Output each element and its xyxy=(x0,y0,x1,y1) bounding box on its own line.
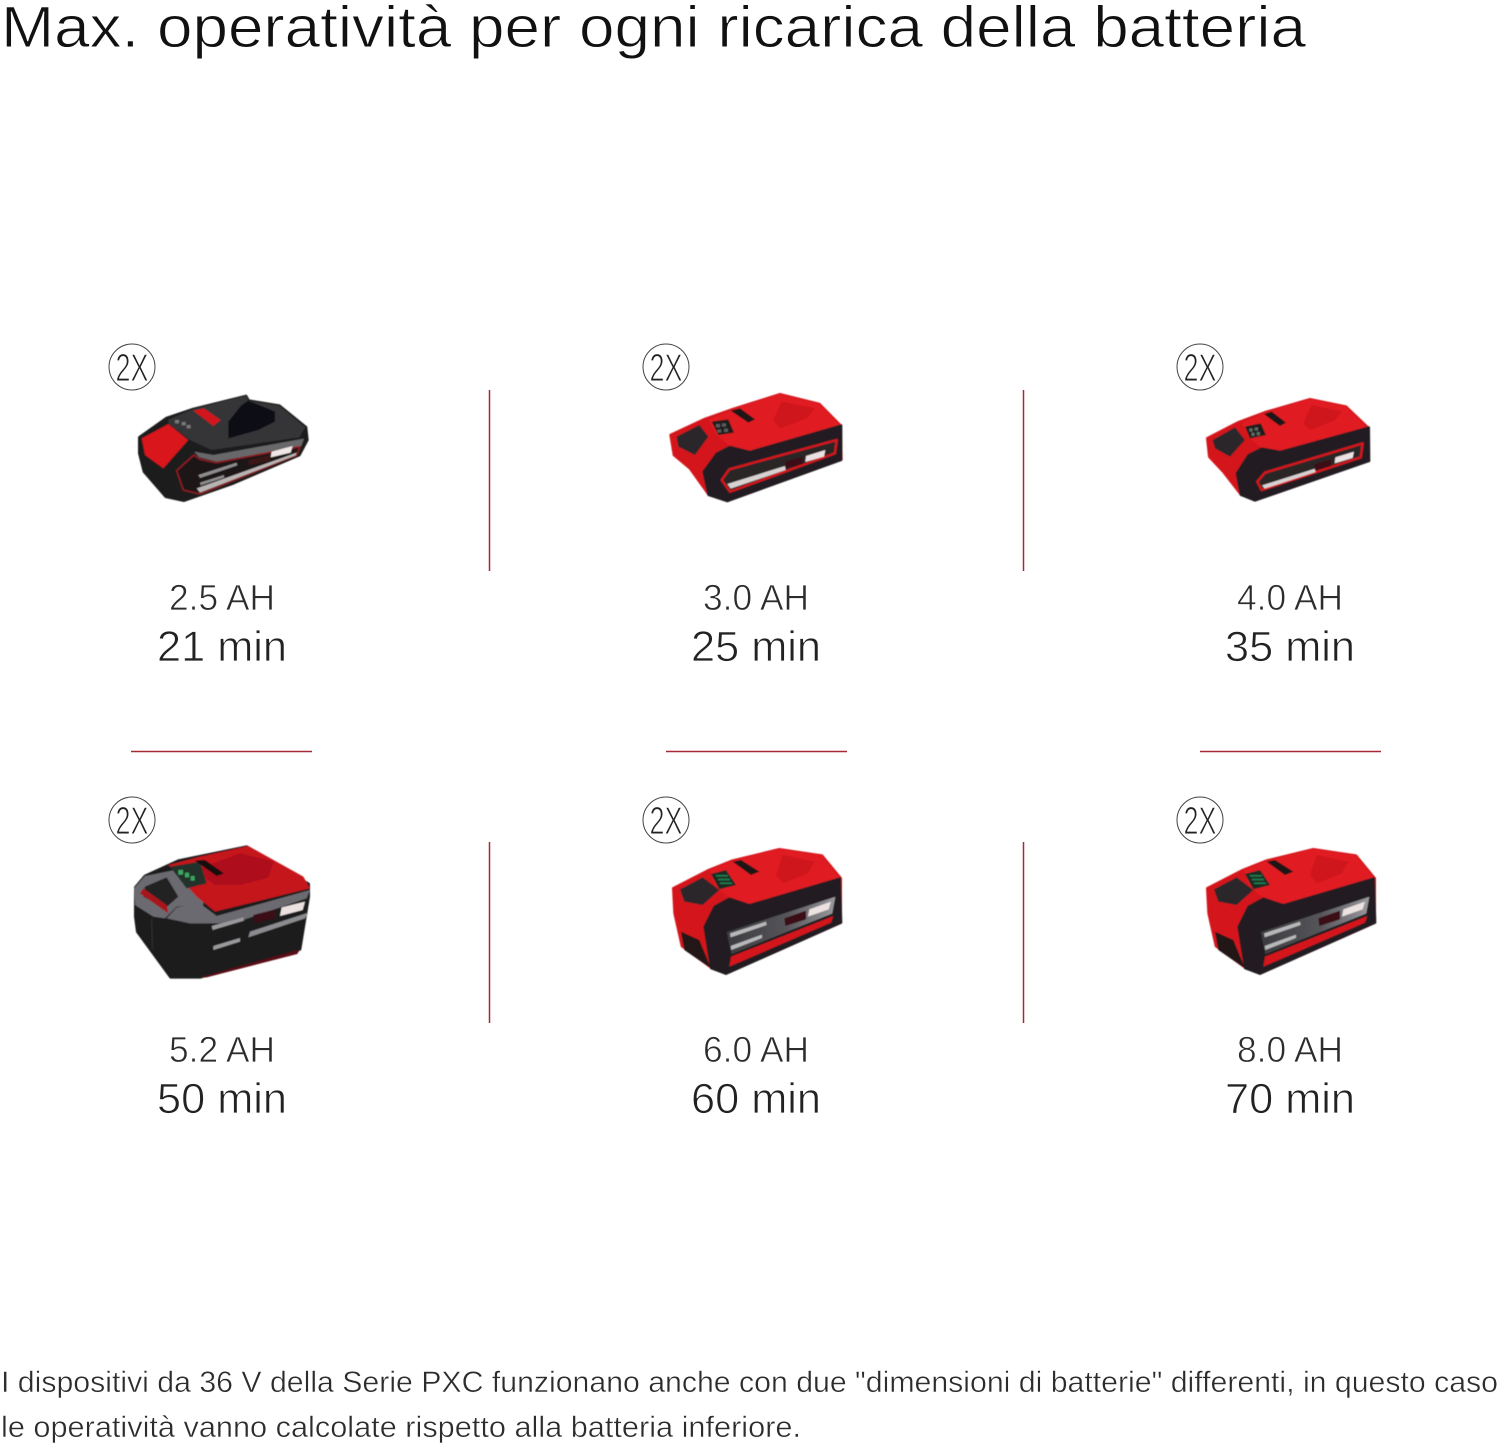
runtime: 50 min xyxy=(157,1075,287,1123)
panel: 2.5 AH battery xyxy=(109,344,307,671)
capacity label: 2.5 AH xyxy=(169,577,275,618)
badge: 2X xyxy=(1177,797,1223,843)
capacity label: 5.2 AH xyxy=(169,1029,275,1070)
runtime: 70 min xyxy=(1225,1075,1355,1123)
divider xyxy=(488,390,490,571)
runtime: 21 min xyxy=(157,623,287,671)
badge: 2X: 2X xyxy=(1184,800,1216,843)
runtime: 35 min xyxy=(1225,623,1355,671)
badge: 2X xyxy=(643,344,689,390)
panel: 6.0 AH battery xyxy=(643,797,841,1123)
panel: 4.0 AH battery xyxy=(1177,344,1369,671)
footnote: le operatività vanno calcolate rispetto alla batteria inferiore. xyxy=(1,1411,801,1444)
panel: 3.0 AH battery xyxy=(643,344,841,671)
footnote: I dispositivi da 36 V della Serie PXC funzionano anche con due "dimensioni di batterie" differenti, in questo caso xyxy=(1,1366,1498,1399)
capacity label: 6.0 AH xyxy=(703,1029,809,1070)
badge: 2X: 2X xyxy=(116,347,148,390)
capacity label: 3.0 AH xyxy=(703,577,809,618)
row separators xyxy=(131,750,1381,752)
badge: 2X: 2X xyxy=(650,800,682,843)
capacity label: 4.0 AH xyxy=(1237,577,1343,618)
badge: 2X xyxy=(643,797,689,843)
capacity label: 8.0 AH xyxy=(1237,1029,1343,1070)
icon: 3.0 Ah battery xyxy=(671,394,841,501)
footnote xyxy=(1,1366,1498,1444)
icon: 4.0 Ah battery xyxy=(1207,399,1369,501)
badge: 2X xyxy=(1177,344,1223,390)
icon: 8.0 Ah battery xyxy=(1207,849,1375,974)
runtime: 25 min xyxy=(691,623,821,671)
icon: 2.5 Ah battery xyxy=(139,396,307,501)
panel: 5.2 AH battery xyxy=(109,797,310,1123)
panel: 8.0 AH battery xyxy=(1177,797,1375,1123)
divider xyxy=(1022,842,1024,1023)
icon: 6.0 Ah battery xyxy=(673,849,841,974)
badge: 2X xyxy=(109,797,155,843)
badge: 2X: 2X xyxy=(650,347,682,390)
divider xyxy=(488,842,490,1023)
badge: 2X: 2X xyxy=(1184,347,1216,390)
icon: 5.2 Ah battery xyxy=(134,846,310,977)
badge: 2X: 2X xyxy=(116,800,148,843)
runtime: 60 min xyxy=(691,1075,821,1123)
divider xyxy=(1022,390,1024,571)
badge: 2X xyxy=(109,344,155,390)
